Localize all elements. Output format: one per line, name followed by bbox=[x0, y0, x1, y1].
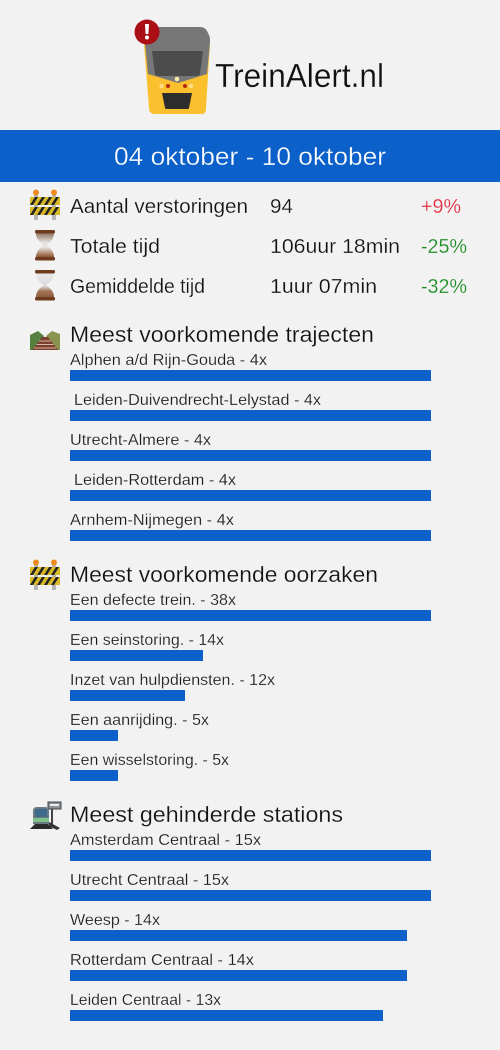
bar: Leiden Centraal: Leiden Centraal - 13x bbox=[70, 992, 221, 1009]
logo: train with alert bbox=[134, 20, 210, 114]
bar: Een wisselstoring bbox=[70, 752, 229, 781]
site title: TreinAlert.nl bbox=[215, 57, 384, 94]
heading: Meest voorkomende oorzaken bbox=[70, 562, 378, 587]
icon: hourglass bbox=[35, 230, 55, 260]
bar: Inzet van hulpdiensten bbox=[70, 672, 275, 701]
stat row: aantal verstoringen: +9% bbox=[421, 195, 461, 218]
bar: Utrecht Centraal bbox=[70, 872, 431, 901]
date banner bbox=[0, 130, 500, 182]
icon: barricade bbox=[30, 560, 60, 590]
bar: Een seinstoring bbox=[70, 632, 224, 661]
bar: Utrecht Centraal: Utrecht Centraal - 15x bbox=[70, 872, 229, 889]
icon: hourglass bbox=[35, 270, 55, 300]
bar: Inzet van hulpdiensten: Inzet van hulpdiensten. - 12x bbox=[70, 672, 275, 689]
bar: Utrecht-Almere: Utrecht-Almere - 4x bbox=[70, 432, 211, 449]
panel: meest voorkomende oorzaken bbox=[30, 560, 431, 781]
stat row: gemiddelde tijd: Gemiddelde tijd bbox=[70, 275, 205, 298]
icon: station bbox=[30, 802, 61, 830]
bar: Weesp: Weesp - 14x bbox=[70, 912, 160, 929]
bar: Leiden-Rotterdam bbox=[70, 472, 431, 501]
bar: Alphen a/d Rijn-Gouda bbox=[70, 352, 431, 381]
bar: Utrecht-Almere bbox=[70, 432, 431, 461]
bar: Amsterdam Centraal bbox=[70, 832, 431, 861]
heading: Meest voorkomende trajecten bbox=[70, 322, 374, 347]
bar: Leiden Centraal bbox=[70, 992, 383, 1021]
heading: Meest gehinderde stations bbox=[70, 802, 343, 827]
icon: barricade bbox=[30, 190, 60, 220]
bar: Rotterdam Centraal: Rotterdam Centraal - 14x bbox=[70, 952, 254, 969]
bar: Leiden-Duivendrecht-Lelystad: Leiden-Duivendrecht-Lelystad - 4x bbox=[74, 392, 321, 409]
stat row: aantal verstoringen bbox=[30, 190, 461, 220]
stat row: totale tijd: 106uur 18min bbox=[270, 235, 400, 258]
icon: railway track bbox=[30, 331, 60, 350]
bar: Leiden-Duivendrecht-Lelystad bbox=[70, 392, 431, 421]
bar: Een aanrijding bbox=[70, 712, 209, 741]
stat row: aantal verstoringen: 94 bbox=[270, 195, 293, 218]
bar: Arnhem-Nijmegen: Arnhem-Nijmegen - 4x bbox=[70, 512, 234, 529]
panel: meest gehinderde stations bbox=[30, 802, 431, 1021]
bar: Een wisselstoring: Een wisselstoring. - 5x bbox=[70, 752, 229, 769]
stat row: totale tijd: -25% bbox=[421, 235, 467, 258]
date banner: 04 oktober - 10 oktober bbox=[114, 143, 386, 171]
bar: Rotterdam Centraal bbox=[70, 952, 407, 981]
bar: Een seinstoring: Een seinstoring. - 14x bbox=[70, 632, 224, 649]
bar: Leiden-Rotterdam: Leiden-Rotterdam - 4x bbox=[74, 472, 236, 489]
stat row: aantal verstoringen: Aantal verstoringen bbox=[70, 195, 248, 218]
stat row: gemiddelde tijd: 1uur 07min bbox=[270, 275, 377, 298]
bar: Een defecte trein: Een defecte trein. - 38x bbox=[70, 592, 236, 609]
bar: Arnhem-Nijmegen bbox=[70, 512, 431, 541]
bar: Weesp bbox=[70, 912, 407, 941]
stat row: gemiddelde tijd bbox=[35, 270, 467, 300]
stat row: totale tijd bbox=[35, 230, 467, 260]
stat row: gemiddelde tijd: -32% bbox=[421, 275, 467, 298]
bar: Een aanrijding: Een aanrijding. - 5x bbox=[70, 712, 209, 729]
panel: meest voorkomende trajecten bbox=[30, 322, 431, 541]
bar: Alphen a/d Rijn-Gouda: Alphen a/d Rijn-Gouda - 4x bbox=[70, 352, 267, 369]
bar: Amsterdam Centraal: Amsterdam Centraal - 15x bbox=[70, 832, 261, 849]
bar: Een defecte trein bbox=[70, 592, 431, 621]
stat row: totale tijd: Totale tijd bbox=[70, 235, 160, 258]
